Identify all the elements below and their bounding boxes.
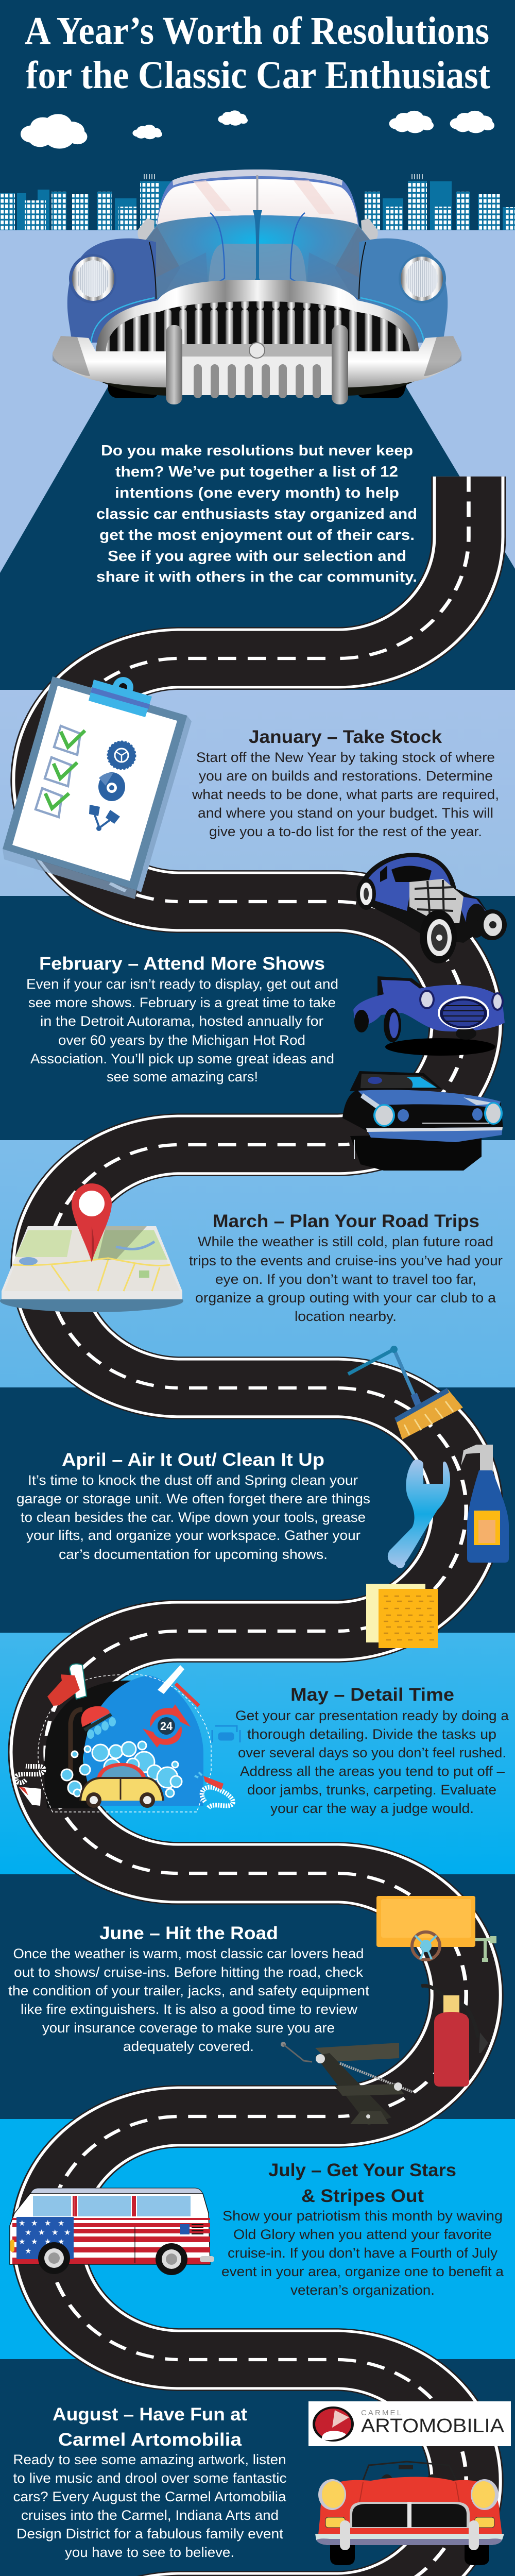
icon: flag painted van: ★ (31, 2219, 38, 2228)
heading: June: June – Hit the Road (99, 1923, 278, 1943)
icon: brake disc (98, 772, 125, 801)
icon: clipboard (3, 676, 192, 899)
text block: June: Once the weather is warm, most classic car lovers head (13, 1946, 364, 1961)
icon: wrench (388, 1460, 450, 1568)
panel: February (26, 954, 505, 1171)
clip (89, 677, 152, 717)
text block: May: door jambs, trunks, carpeting. Evaluate (247, 1782, 496, 1798)
icon: broom (348, 1346, 463, 1439)
text block: August (13, 2452, 287, 2560)
title: for the Classic Car Enthusiast (26, 54, 490, 97)
text block: May: Get your car presentation ready by doing a (235, 1708, 509, 1723)
text block: April (16, 1472, 370, 1562)
panel: May (16, 1584, 509, 1816)
icon: tire (108, 741, 135, 769)
small car wash icon (212, 1726, 240, 1742)
icon: car jack (281, 2042, 412, 2125)
text block: March: organize a group outing with your car club to a (195, 1290, 496, 1306)
icon: red convertible (315, 2462, 504, 2565)
text block: July: Old Glory when you attend your favorite (233, 2227, 492, 2242)
icon: flag painted van: ★ (19, 2219, 25, 2228)
text block: April: It’s time to knock the dust off and Spring clean your (28, 1472, 358, 1488)
icon: sponges (366, 1584, 438, 1648)
heading: March: March – Plan Your Road Trips (213, 1211, 479, 1231)
classic blue car front view (53, 170, 461, 404)
text block: March (189, 1234, 503, 1324)
panel: August (13, 2401, 511, 2565)
24 hour badge (143, 1704, 191, 1748)
text block: March: location nearby. (295, 1309, 397, 1324)
intro text: See if you agree with our selection and (108, 548, 406, 565)
title: A Year’s Worth of Resolutions (25, 9, 489, 53)
winding road (8, 477, 469, 2576)
text block: June: the condition of your trailer, jacks, and safety equipment (8, 1983, 370, 1998)
squeegee (158, 1665, 199, 1706)
icon: blue hot rod (356, 853, 507, 963)
logo: Carmel Artomobilia (308, 2401, 511, 2446)
text block: February: see some amazing cars! (107, 1069, 258, 1084)
text block: April: to clean besides the car. Wipe down your tools, grease (21, 1510, 366, 1525)
icon: yellow trailer (376, 1896, 496, 1962)
text block: May: over several days so you don’t feel rushed. (238, 1745, 506, 1760)
icon: flag painted van: ★ (19, 2238, 25, 2246)
icon: folded map (0, 1226, 183, 1312)
icon: blue muscle car (342, 1071, 503, 1171)
text block: July: event in your area, organize one to benefit a (221, 2264, 504, 2279)
text block: February: over 60 years by the Michigan Hot Rod (58, 1032, 305, 1048)
icon: flag painted van: ★ (25, 2247, 31, 2256)
text block: May: Address all the areas you tend to put off – (240, 1764, 505, 1779)
fenders (67, 239, 156, 343)
icon: fire extinguisher (421, 1986, 488, 2087)
headlights (69, 254, 446, 303)
glove and sponge (47, 1664, 87, 1706)
panel: July (10, 2160, 504, 2298)
text block: August: cruises into the Carmel, Indiana Arts and (21, 2507, 279, 2523)
title (25, 9, 490, 97)
intro text: them? We’ve put together a list of 12 (115, 464, 398, 480)
intro text: Do you make resolutions but never keep (101, 443, 413, 459)
roof and windshield (156, 170, 359, 229)
icon: blue sports car (353, 976, 505, 1056)
intro text: classic car enthusiasts stay organized and (96, 506, 417, 522)
icon: flag painted van (10, 2188, 214, 2275)
door mirrors (138, 218, 378, 241)
icon: flag painted van: ★ (38, 2228, 45, 2237)
text block: May: thorough detailing. Divide the tasks up (247, 1726, 496, 1742)
hood (144, 215, 372, 309)
text block: June: out to shows/ cruise-ins. Before hitting the road, check (14, 1964, 364, 1980)
text block: June: your insurance coverage to make sure you are (42, 2020, 335, 2036)
left hose and nozzle (16, 1766, 44, 1806)
panel: January (3, 676, 507, 963)
icon: flag painted van: ★ (58, 2219, 64, 2228)
text block: August: cars? Every August the Carmel Artomobilia (13, 2489, 287, 2504)
logo: Carmel Artomobilia: CARMEL (361, 2409, 401, 2417)
intro text: share it with others in the car community. (96, 569, 417, 585)
icon: flag painted van: ★ (52, 2228, 58, 2237)
heading: February: February – Attend More Shows (39, 954, 325, 974)
heading: August (53, 2404, 247, 2450)
heading: July: & Stripes Out (301, 2186, 424, 2206)
icon: spray bottle (461, 1445, 509, 1563)
panel: March (0, 1183, 503, 1324)
text block: May: your car the way a judge would. (270, 1801, 474, 1816)
heading: July: July – Get Your Stars (268, 2160, 456, 2180)
text block: April: your lifts, and organize your workspace. Gather your (26, 1528, 360, 1543)
text block: January: you are on builds and restorations. Determine (199, 768, 493, 784)
icon: pistons (89, 805, 120, 831)
text block: March: While the weather is still cold, plan future road (198, 1234, 493, 1249)
text block: January: give you a to-do list for the rest of the year. (209, 824, 482, 839)
brown gantry (71, 1709, 82, 1777)
text block: August: to live music and drool over some fantastic (13, 2470, 286, 2486)
text block: February (26, 976, 338, 1084)
heading: August: Carmel Artomobilia (58, 2430, 242, 2450)
text block: July: veteran’s organization. (290, 2282, 435, 2298)
intro text: intentions (one every month) to help (115, 485, 399, 501)
panel: June (8, 1896, 496, 2125)
check boxes (36, 726, 80, 817)
text block: June: adequately covered. (123, 2039, 254, 2054)
icon: flag painted van: ★ (58, 2238, 64, 2246)
text block: June: like fire extinguishers. It is also a good time to review (21, 2002, 358, 2017)
24 hour badge: 24 (160, 1720, 173, 1733)
intro text: get the most enjoyment out of their cars. (99, 527, 415, 544)
icon: car wash scene (16, 1664, 240, 1812)
heading: January: January – Take Stock (249, 727, 442, 747)
icon: flag painted van: ★ (44, 2219, 51, 2228)
text block: January (192, 750, 499, 839)
yellow car (80, 1763, 163, 1808)
text block: January: Start off the New Year by taking stock of where (196, 750, 495, 765)
text block: January: what needs to be done, what parts are required, (192, 787, 499, 802)
icon: flag painted van: ★ (44, 2238, 51, 2246)
icon: flag painted van: ★ (25, 2228, 31, 2237)
text block: April: garage or storage unit. We often forget there are things (16, 1491, 370, 1506)
text block: August: Design District for a fabulous family event (16, 2526, 284, 2541)
text block: July (221, 2208, 504, 2298)
text block: April: car’s documentation for upcoming shows. (59, 1547, 328, 1562)
bubbles (61, 1741, 182, 1797)
header panel (0, 9, 515, 585)
text block: July: cruise-in. If you don’t have a Fourth of July (228, 2245, 498, 2261)
text block: February: in the Detroit Autorama, hosted annually for (40, 1013, 323, 1029)
tyres (108, 384, 407, 398)
icon: location pin (72, 1183, 112, 1262)
text block: February: Association. You’ll pick up some great ideas and (30, 1051, 334, 1066)
panel: April (16, 1346, 509, 1568)
text block: May (235, 1708, 509, 1816)
text block: February: Even if your car isn’t ready to display, get out and (26, 976, 338, 992)
heading: May: May – Detail Time (290, 1685, 454, 1705)
text block: March: eye on. If you don’t want to travel too far, (215, 1272, 476, 1287)
heading: July (268, 2160, 456, 2206)
text block: July: Show your patriotism this month by waving (222, 2208, 503, 2224)
text block: March: trips to the events and cruise-ins you’ve had your (189, 1253, 503, 1268)
text block: June (8, 1946, 370, 2054)
grille (91, 280, 424, 355)
red wash brush (81, 1706, 116, 1739)
clouds (21, 110, 494, 148)
text block: August: you have to see to believe. (65, 2545, 234, 2560)
text block: January: and where you stand on your budget. This will (198, 805, 493, 821)
bumper (53, 325, 461, 404)
city skyline (0, 174, 515, 230)
hose and nozzle (195, 1772, 233, 1808)
heading: April: April – Air It Out/ Clean It Up (62, 1450, 324, 1470)
intro text (96, 443, 417, 585)
text block: February: see more shows. February is a great time to take (28, 995, 336, 1010)
heading: August: August – Have Fun at (53, 2404, 247, 2425)
logo: Carmel Artomobilia: ARTOMOBILIA (361, 2415, 505, 2437)
text block: August: Ready to see some amazing artwork, listen (13, 2452, 286, 2467)
icon: flag painted van: ★ (31, 2238, 38, 2246)
icon: flag painted van: ★ (64, 2228, 71, 2237)
